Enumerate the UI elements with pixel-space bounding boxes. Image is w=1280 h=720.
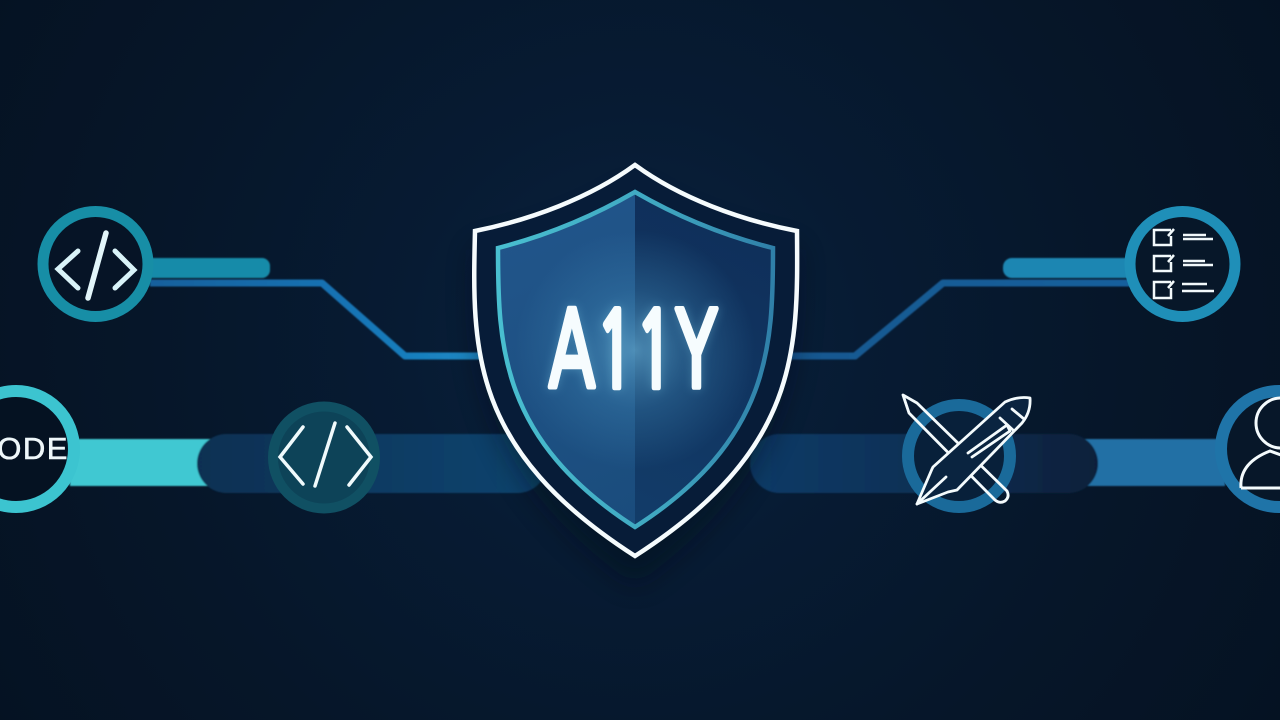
icon: code badge upper left bbox=[43, 212, 148, 316]
title: A11Y: A11Y bbox=[548, 299, 718, 404]
pen bbox=[917, 398, 1030, 504]
right connector bars bbox=[750, 258, 1225, 493]
shield shadow bbox=[474, 190, 797, 585]
icon: pen and pencil badge bbox=[903, 395, 1030, 507]
shield bbox=[474, 165, 797, 556]
bar: user blue bbox=[1070, 439, 1225, 486]
shield centre glow bbox=[515, 230, 755, 470]
shield inner outline bbox=[498, 192, 773, 527]
icon: CODE badge bbox=[0, 391, 74, 507]
icon: user badge bbox=[1221, 391, 1280, 507]
shield face left half bbox=[498, 192, 635, 527]
pill: lower left track bbox=[197, 434, 547, 493]
connector line: upper right bbox=[788, 283, 1130, 356]
shield face right half bbox=[635, 192, 773, 527]
icon: code badge lower bbox=[268, 402, 380, 514]
pill: lower right track bbox=[750, 434, 1098, 493]
pencil bbox=[903, 395, 1008, 502]
bar: upper left bbox=[150, 258, 270, 278]
title glow: A11Y bbox=[548, 299, 718, 404]
bar: upper right bbox=[1003, 258, 1130, 278]
left connector bars bbox=[70, 258, 547, 493]
shield outer frame bbox=[474, 165, 797, 556]
connector line: upper left bbox=[150, 283, 482, 356]
bar: code teal bbox=[70, 439, 230, 486]
icon: checklist badge bbox=[1130, 212, 1235, 316]
